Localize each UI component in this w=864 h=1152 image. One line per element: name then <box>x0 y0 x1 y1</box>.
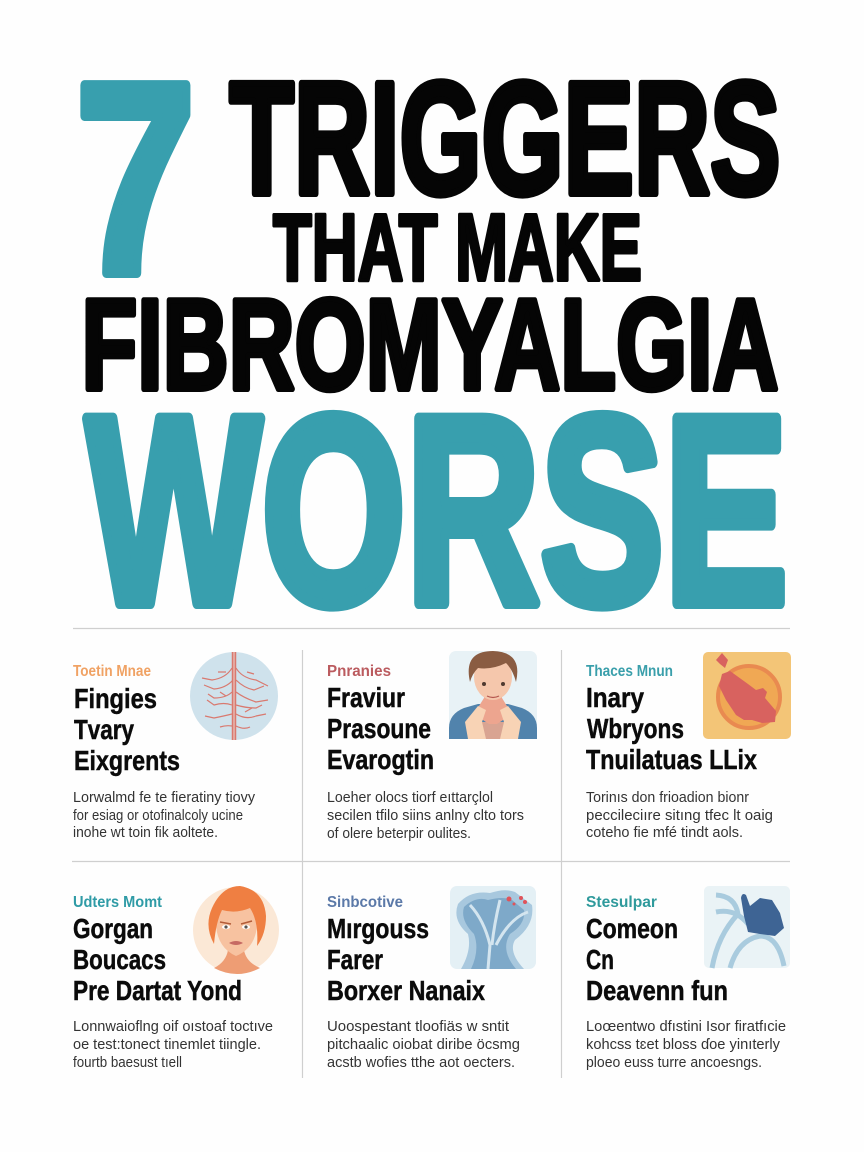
panel heading: Eixgrents <box>74 745 180 776</box>
panel: trigger 4 <box>73 886 279 1071</box>
title <box>75 26 788 660</box>
panel heading: Farer <box>327 944 383 975</box>
panel body text <box>73 1018 273 1071</box>
panel heading: Inary <box>586 682 644 713</box>
panel body text: secilen tfilo siins anlny clto tors <box>327 807 524 824</box>
icon: inflamed limb <box>703 652 791 739</box>
panel heading: Mırgouss <box>327 913 429 944</box>
panel heading: Fingies <box>74 683 157 714</box>
panel heading: Wbryons <box>587 713 684 744</box>
panel heading <box>327 913 485 1006</box>
panel heading: Fraviur <box>327 682 405 713</box>
panel body text: inohe wt toin fik aoltete. <box>73 824 218 841</box>
panel: trigger 1 <box>73 652 278 841</box>
icon: shoulder and dark nerve mass <box>704 886 790 968</box>
panel body text <box>327 1018 520 1071</box>
panel heading: Tvary <box>74 714 134 745</box>
panel body text: Loeher olocs tiorf eıttarçlol <box>327 789 493 806</box>
panel heading: Evarogtin <box>327 744 434 775</box>
panel heading: Prasoune <box>327 713 431 744</box>
panel heading: Borxer Nanaix <box>327 975 485 1006</box>
panel body text: of olere beterpir oulites. <box>327 825 471 842</box>
panel heading <box>73 913 242 1006</box>
panel body text: Lorwalmd fe te fieratiny tiovy <box>73 789 255 806</box>
panel label: Thaces Mnun <box>586 663 673 680</box>
title line: THAT MAKE: THAT MAKE <box>273 195 642 301</box>
panel: trigger 6 <box>586 886 790 1071</box>
icon: nerve head and shoulders <box>450 886 536 969</box>
icon: person touching neck <box>449 651 537 739</box>
panel body text: peccileciıre sitıng tfec lt oaig <box>586 807 773 824</box>
panel heading <box>74 683 180 776</box>
panel body text: fourtb baesust tıell <box>73 1054 182 1071</box>
panel body text <box>586 1018 786 1071</box>
panel heading <box>586 682 757 775</box>
panel heading: Gorgan <box>73 913 153 944</box>
icon: frowning woman <box>193 886 279 974</box>
panel body text <box>73 789 255 841</box>
panel body text: Loœentwo dfıstini Isor firatfıcie <box>586 1018 786 1035</box>
panel: trigger 5 <box>327 886 536 1071</box>
panel label: Sinbcotive <box>327 894 403 911</box>
title numeral 7: 7 <box>75 26 196 331</box>
panel body text: Torinıs don frioadion bionr <box>586 789 749 806</box>
panel body text <box>327 789 524 842</box>
panel body text: acstb wofies tthe aot oecters. <box>327 1054 515 1071</box>
panel body text: Uoospestant tloofiäs w sntit <box>327 1018 510 1035</box>
panel label: Pnranies <box>327 663 391 680</box>
panel body text: Lonnwaioflng oif oıstoaf toctıve <box>73 1018 273 1035</box>
panel body text: ploeo euss turre ancoesngs. <box>586 1054 762 1071</box>
panel body text: for esiag or otofinalcoly ucine <box>73 807 243 824</box>
panel heading <box>327 682 434 775</box>
panel label: Toetin Mnae <box>73 663 151 680</box>
panel body text: oe test:tonect tinemlet tiingle. <box>73 1036 261 1053</box>
panel body text: coteho fie mfé tindt aols. <box>586 824 743 841</box>
panel body text <box>586 789 773 841</box>
panel body text: pitchaalic oiobat diribe öcsmg <box>327 1036 520 1053</box>
panel label: Udters Momt <box>73 894 163 911</box>
panel body text: kohcss tɛet bloss ɗoe yinıterly <box>586 1036 780 1053</box>
panel: trigger 3 <box>586 652 791 841</box>
panel heading <box>586 913 728 1006</box>
panel heading: Cn <box>586 944 614 975</box>
icon: nerve fibres <box>190 652 278 740</box>
panel: trigger 2 <box>327 651 537 842</box>
panel heading: Deavenn fun <box>586 975 728 1006</box>
panel heading: Tnuilatuas LLix <box>586 744 757 775</box>
panel heading: Pre Dartat Yond <box>73 975 242 1006</box>
panel label: Stesulpar <box>586 894 657 911</box>
panel heading: Comeon <box>586 913 678 944</box>
panel heading: Boucacs <box>73 944 166 975</box>
